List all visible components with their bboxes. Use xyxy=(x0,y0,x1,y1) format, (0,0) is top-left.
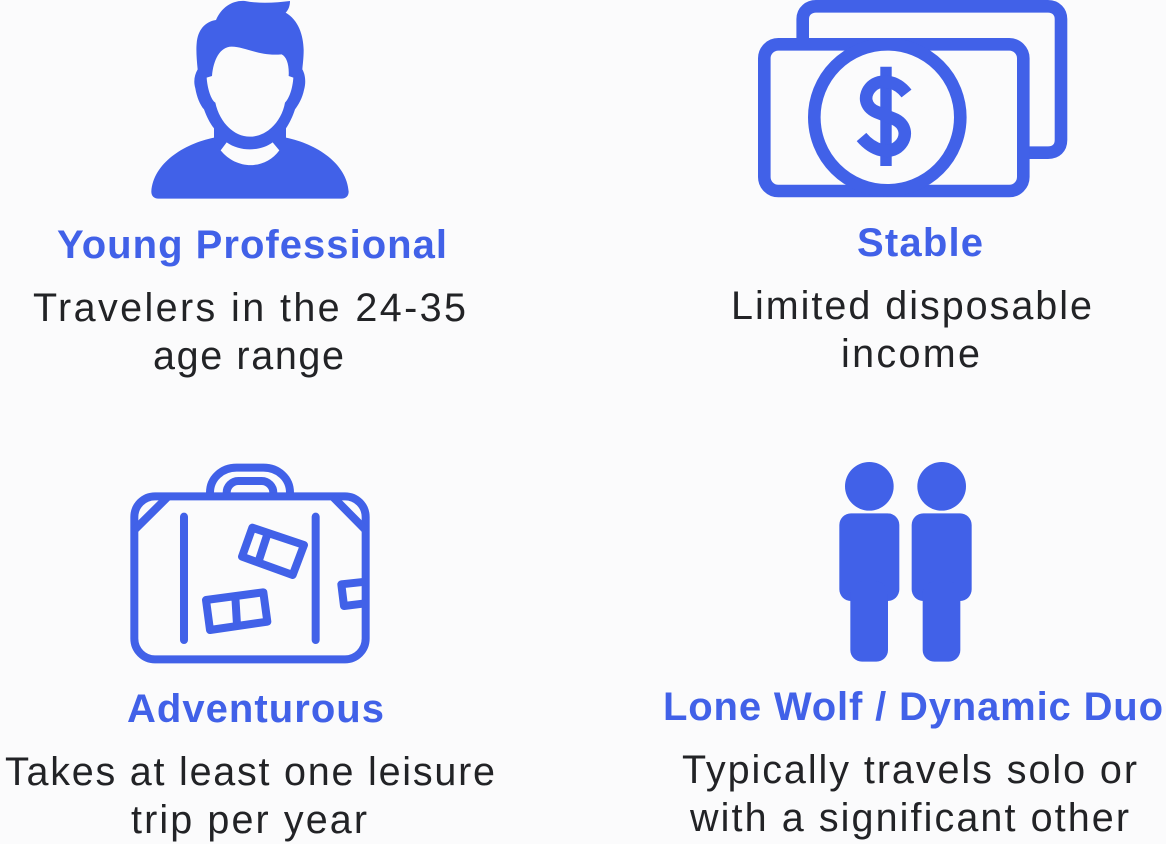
text: income description: income xyxy=(841,332,980,376)
text: age description: age range xyxy=(153,334,344,378)
text: age description xyxy=(33,286,466,378)
icon: young man xyxy=(151,1,349,199)
text: companion description: Typically travels solo or xyxy=(682,748,1137,792)
text: trip description: trip per year xyxy=(131,798,367,842)
heading: adventurous: Adventurous xyxy=(127,687,384,731)
icon: money xyxy=(764,6,1061,191)
heading: young professional: Young Professional xyxy=(57,223,447,267)
icon: suitcase xyxy=(134,468,366,659)
text: income description xyxy=(731,284,1092,376)
panel: lone wolf xyxy=(663,462,1163,840)
text: trip description xyxy=(5,750,495,842)
panel: stable xyxy=(731,6,1092,376)
panel: adventurous xyxy=(5,468,495,842)
icon: two people xyxy=(839,462,972,662)
heading: lone wolf: Lone Wolf / Dynamic Duo xyxy=(663,685,1163,729)
text: companion description xyxy=(682,748,1137,840)
text: age description: Travelers in the 24-35 xyxy=(33,286,466,330)
heading: stable: Stable xyxy=(857,221,983,265)
text: companion description: with a significant other xyxy=(689,796,1129,840)
text: trip description: Takes at least one leisure xyxy=(5,750,495,794)
panel: young professional xyxy=(33,1,466,378)
text: income description: Limited disposable xyxy=(731,284,1092,328)
